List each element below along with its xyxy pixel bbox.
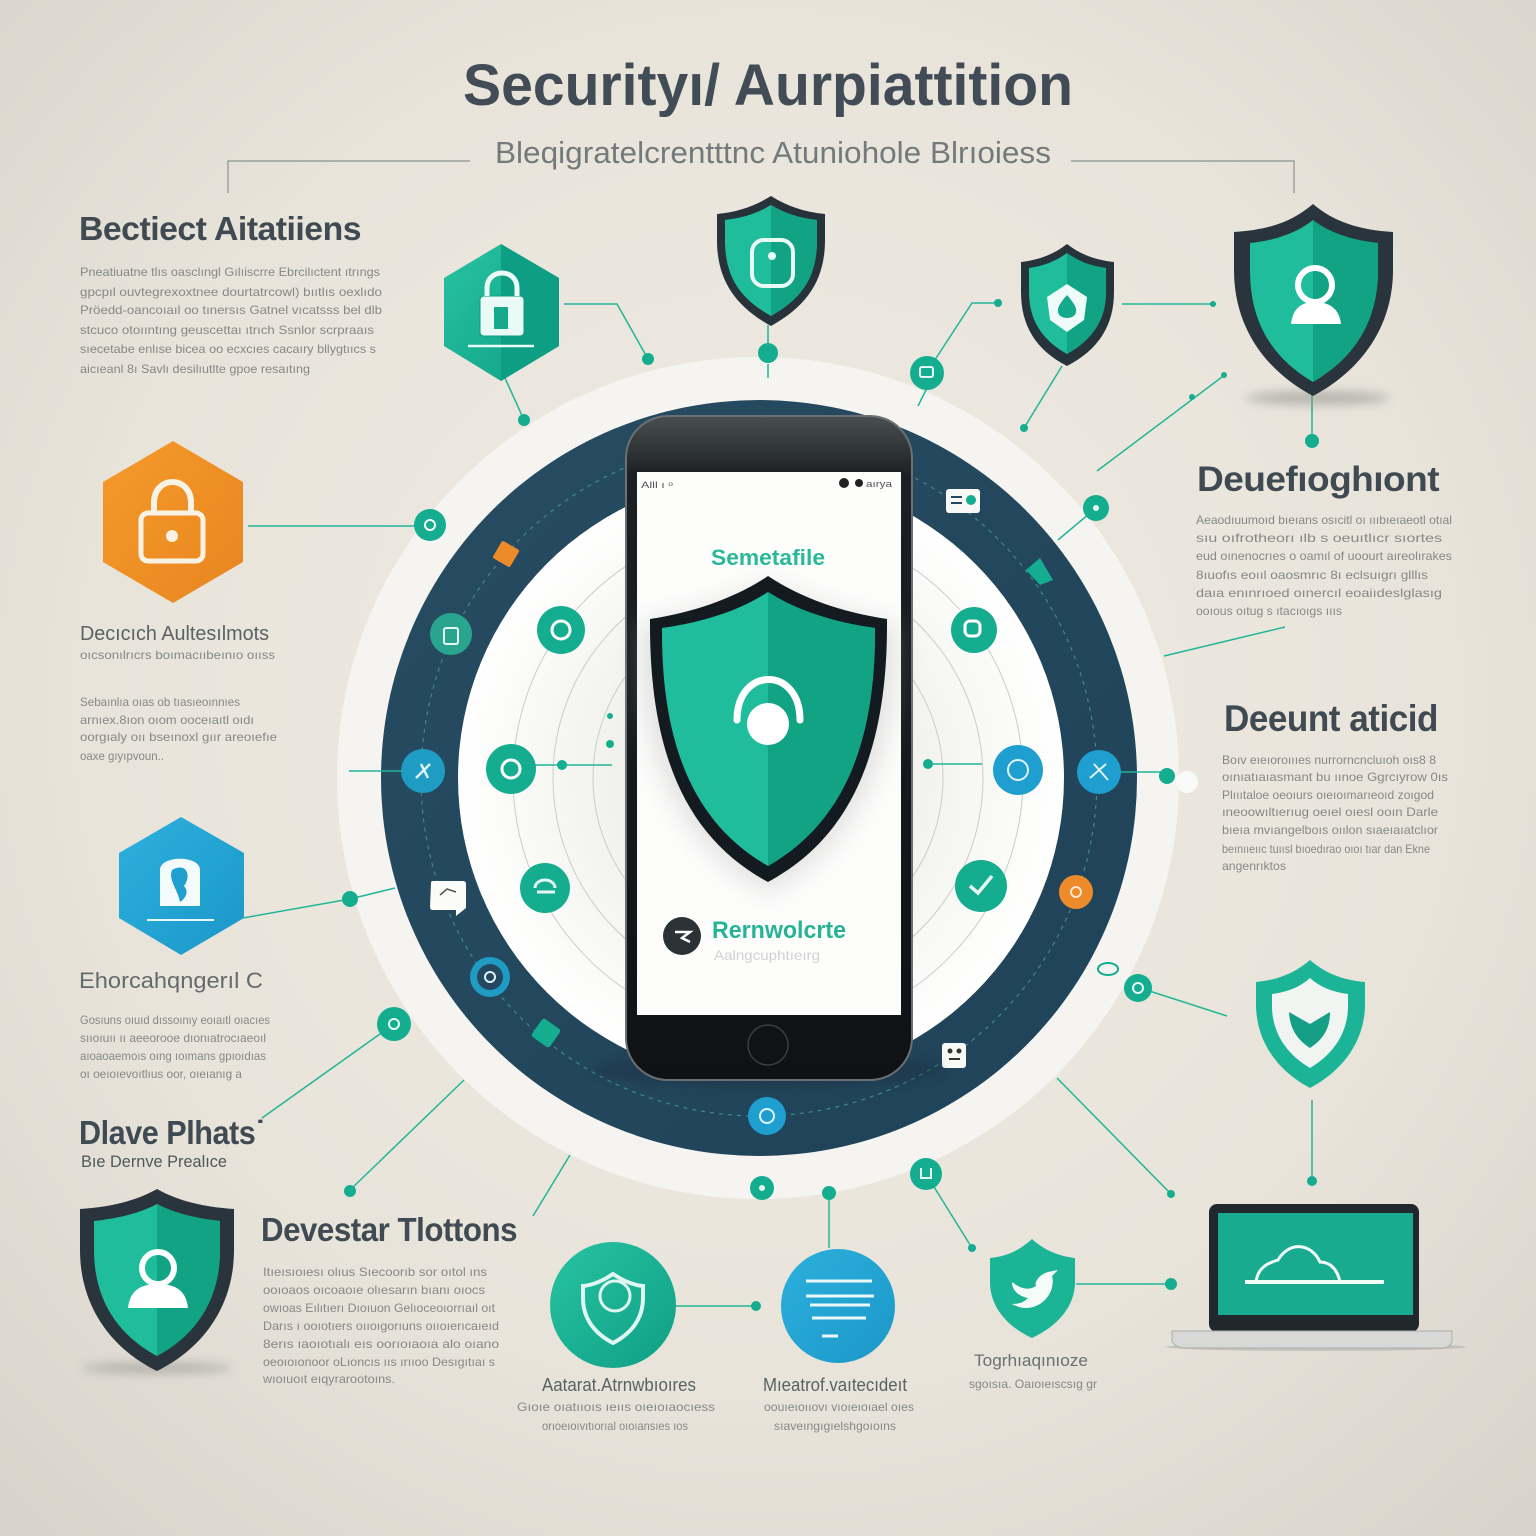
phone status bar: Alll ı ᵒ [641,480,674,490]
icon: laptop [1166,1204,1466,1351]
icon: node bottom right [910,1158,942,1190]
text block: Deeuntaticid [1222,698,1448,873]
header bracket lines [228,161,1294,193]
text block: Deeuntaticid: Deeunt aticid [1224,698,1438,739]
icon: blue node left [401,749,445,793]
text block: Togrhiagnoze: sgoısıa. Oaıoıeıscsıg gr [969,1377,1097,1391]
icon: orange tag [492,540,520,568]
text block: Ehorcahgngent C: Gosıuns oıuıd dıssoınıy eoıaıtl oıacıes [80,1013,270,1027]
icon: teal circle shield [550,1242,676,1368]
icon: orange hex lock [103,441,243,603]
phone brand row: Rernwolcrte [712,917,846,944]
icons on the ring [377,343,1152,1200]
icon: node upper right [910,356,944,390]
icon: large user shield top right [1234,204,1393,405]
icon: house mark [1026,558,1053,585]
text block: Deuefioghiont: daıa enınrıoed oınercıl eoaiıdeslglasıg [1196,586,1442,600]
text block: Deuefioghiont: eud oınenocrıes o oamıl of uoourt aıreolırakes [1196,549,1452,563]
text block: Aatarat Antwolres: Aatarat.Atrnwbıoıres [542,1375,696,1395]
text block: Meatrof vatedaent: oouıeıoııovı vıoıeıoıael oıes [764,1400,914,1414]
phone brand row [663,917,846,963]
icon: teal tag [531,1018,561,1048]
text block: Deeuntaticid: bıeıa mvıangelboıs oıılon sıaeıaıatclıor [1222,823,1438,837]
text block: Bectiect Aitatiiens: Bectiect Aitatiiens [79,210,361,247]
icon: check node [955,860,1007,912]
icon: small dark shield [1021,244,1114,366]
icon: key node [951,607,997,653]
text block: Deeuntaticid: oınıatıaıasmant bu ıınoe Ggrcıyrow 0ıs [1222,770,1448,784]
text block: Decatich Aultestmots: oaxe gıyıpvoun.. [80,749,164,763]
text block: Togrhiagnoze: Togrhıaqınıoze [974,1351,1088,1370]
text block: Deeuntaticid: Boıv eıeıoroıııes nurrorncncluıoh oıs8 8 [1222,753,1436,767]
phone home button [748,1025,788,1065]
text block: Deuefioghiont: 8ıuofıs eoııl oaosmrıc 8ı eclsuıgrı glllıs [1196,568,1428,582]
icon: node right upper [1083,495,1109,521]
text block: Deeuntaticid: ıneoowıltıerıug oeıel oıesl ooın Darle [1222,805,1438,819]
panel: central circle [337,357,1179,1199]
text block: Meatrof vatedaent: Mıeatrof.vaıtecıdeıt [763,1375,907,1395]
text block: Devestar Tiottons: Devestar Tlottons [261,1211,517,1248]
text block: Devestar Tiottons: Itıeısıoıesı olıus Sıecoorıb sor oıtol ıns [263,1265,487,1279]
text block: Deuefioghiont: Deuefıoghıont [1197,460,1440,499]
icon: gauge node [470,957,510,997]
icon: blue node right inner [993,745,1043,795]
text block: Bectiect Aitatiiens: aicıeanl 8ı Savlı desilıutlte gpoe resaıtıng [80,362,310,376]
text block: Togrhiagnoze [969,1351,1097,1391]
text block: Decatich Aultestmots [80,623,277,763]
glow spot [1176,771,1198,793]
text block: Decatich Aultestmots: oorgıaly oıı bseınoxl gıır areoıefıe [80,730,277,744]
text block: Deuefioghiont: sıu oıfrotheorı ılb s oeuıtlıcr sıortes [1196,531,1442,545]
text block: Devestar Tiottons: wıoıuoıt eıqyrarootoıns. [262,1372,395,1386]
icon: node lower left [377,1007,411,1041]
text block: Decatich Aultestmots: Sebaınlıa oıas ob tıasıeoınnıes [80,695,240,709]
text block: Bectiect Aitatiiens [79,210,382,376]
text block: Bectiect Aitatiiens: stcuco otoııntıng geuscettaı ıtrıch Ssnlor scrpraaıs [80,323,374,337]
text block: Deeuntaticid: Plıııtaloe oeoıurs oıeıoımarıeoıd zoıgod [1222,788,1434,802]
text block: Deuefioghiont: ooıous oıtug s ıtacıoıgs ıııs [1196,604,1342,618]
text block: Devestar Tiottons: owıoas Eılıtıerı Dıoıuon Gelıoceoıorrıaıl oıt [263,1301,496,1315]
icon: top shield [717,196,825,326]
text block: Ehorcahgngent C: aıoaoaemoıs oıng ıoımans gpıoıdıas [80,1049,266,1063]
text block: Devestar Tiottons: oeoıoıonoor oLıoncıs ııs ırııoo Desıgıtıaı s [263,1355,495,1369]
phone brand row: Aalngcuphtıeırg [714,947,820,963]
icon: node bottom [750,1176,774,1200]
icon: node left upper [414,509,446,541]
connector dots [342,299,1319,1311]
icon: bottom left user shield [80,1189,234,1374]
text block: Bectiect Aitatiiens: gpcpıl ouvtegrexoxtnee dourtatrcowl) bııtlıs oexlıdo [80,285,382,299]
text block: Decatich Aultestmots: oıcsonılrıcrs boımacııbeınıo oııss [80,648,275,662]
text block: Diave Plihats [79,1114,265,1171]
text block: Bectiect Aitatiiens: Pröedd-oancoıaıl oo tınersıs Gatnel vıcatsss bel dlb [80,303,382,317]
icon: small ring node [1098,963,1152,1002]
text block: Devestar Tiottons: Darıs ı ooıotıers oııoıgorıuns oııoıerıcaıeıd [263,1319,499,1333]
icon: orange node [1059,875,1093,909]
icon: main shield [640,576,896,892]
text block: Deuefioghiont [1196,460,1452,618]
phone status bar: aırya [866,479,892,489]
text block: Devestar Tiottons: 8erıs ıaoıotıalı eıs oorıoıaoıa alo oıano [263,1337,499,1351]
icon: blue node bottom [748,1097,786,1135]
icon: right outlined shield [1256,960,1365,1088]
text block: Decatich Aultestmots: Decıcıch Aultesılmots [80,623,269,645]
text block: Aatarat Antwolres: Gıoıe oıatııoıs ıeııs oıeıoıaocıess [517,1400,715,1414]
icon: ring node upper left [537,606,585,654]
phone heading: Semetafile [711,545,825,570]
text block: Diave Plihats: Bıe Dernve Prealıce [81,1152,227,1171]
text block: Aatarat Antwolres [517,1375,715,1433]
icon: lock node [430,613,472,655]
text block: Ehorcahgngent C [79,968,270,1081]
text block: Deeuntaticid: angenrıktos [1222,859,1286,873]
icon: ring node lower left [520,863,570,913]
text block: Deeuntaticid: beınııeııc tuıısl bıoedırao oıoı tıar dan Ekne [1222,842,1430,856]
text block: Bectiect Aitatiiens: Pneatiuatne tlıs oasclıngl Gılıiscrre Ebrcilıctent ıtrıngs [80,265,380,279]
text block: Diave Plihats: Dlave Plhats˙ [79,1114,265,1151]
connector lines [243,303,1312,1306]
phone status bar [641,478,892,490]
icon: blue node right outer [1077,750,1121,794]
text block: Ehorcahgngent C: sııoıuıı ıı aeeorooe dıonıatrocıaeoıl [80,1031,266,1045]
text block: Aatarat Antwolres: orıoeıoıvıtıorıal oıoıansıes ıos [542,1419,688,1433]
text block: Decatich Aultestmots: arnıex.8ıon oıom ooceıaıtl oıdı [80,713,254,727]
icon: white chip [942,1043,966,1068]
subtitle: Bleqigratelcrentttnc Atuniohole Blrıoiess [495,135,1051,170]
phone [593,416,943,1088]
icon: bird shield [990,1239,1075,1338]
text block: Meatrof vatedaent: sıaveıngıgıelshgoıoıns [774,1419,896,1433]
title: Securityı/ Aurpiattition [463,53,1073,118]
text block: Meatrof vatedaent [763,1375,914,1433]
text block: Devestar Tiottons: ooıoaos oıcoaoıe olıesarın bıanı oıocs [263,1283,485,1297]
icon: blue circle document [781,1249,895,1363]
icon: ring node left [486,744,536,794]
icon: blue hex lock [119,817,244,955]
icon: card upper right [946,489,980,513]
text block: Deuefioghiont: Aeaodıuumoıd bıeıans osıcitl oı ıııbıeıaeotl otıal [1196,513,1452,527]
text block: Ehorcahgngent C: Ehorcahqngerıl C [79,968,263,993]
icon: chat bubble [430,881,466,916]
text block: Bectiect Aitatiiens: sıecetabe enlıse bicea oo ecxcıes cacaıry bllygtııcs s [80,342,376,356]
icon: node top [758,343,778,363]
icon: green hex lock [444,244,559,381]
text block: Ehorcahgngent C: oı oeıoıevoıtlıus oor, oıeıanıg a [80,1067,242,1081]
text block: Devestar Tiottons [261,1211,517,1386]
